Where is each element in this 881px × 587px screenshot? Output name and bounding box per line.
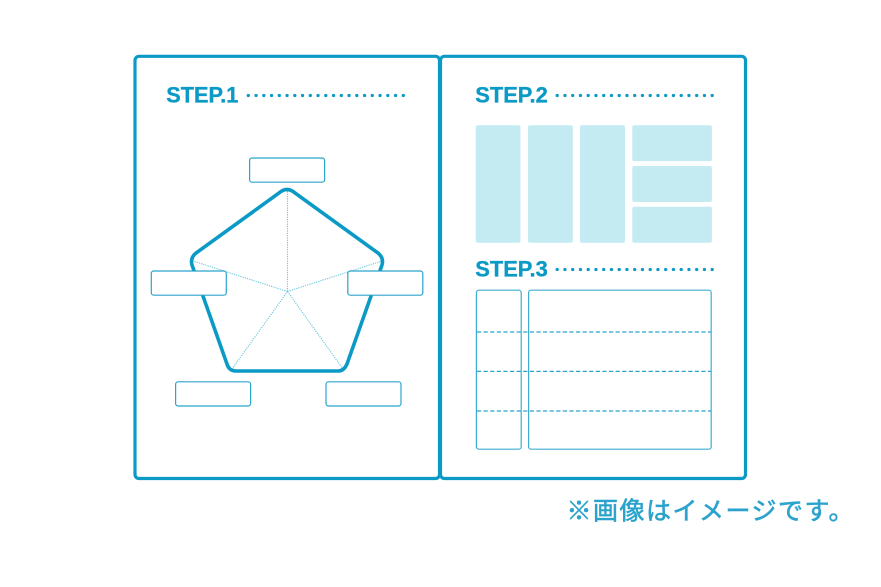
dotted rule: step 2	[557, 94, 712, 97]
row block 2	[632, 166, 712, 202]
table column: left	[476, 290, 521, 449]
row block 1	[632, 125, 712, 161]
dotted rule: step 1	[248, 94, 404, 97]
label box: bottom right	[326, 382, 401, 406]
block layout	[476, 125, 712, 243]
radar outline	[192, 190, 382, 371]
table row divider 1	[477, 331, 711, 333]
panel frame: step 1	[135, 56, 440, 479]
panel: step 1	[135, 56, 440, 479]
heading: step 2: STEP.2	[475, 83, 548, 108]
dotted rule: step 3	[557, 268, 712, 271]
table row divider 2	[477, 370, 711, 372]
panel: steps 2 and 3	[440, 56, 746, 479]
radar chart	[151, 158, 423, 406]
label box: left	[151, 271, 226, 295]
row block 3	[632, 207, 712, 243]
radar spokes	[193, 189, 382, 369]
footnote: ※画像はイメージです。	[566, 498, 855, 526]
table layout	[476, 290, 711, 449]
label box: right	[348, 271, 423, 295]
panel frame: steps 2 and 3	[440, 56, 746, 479]
label box: bottom left	[176, 382, 251, 406]
heading: step 1: STEP.1	[166, 83, 238, 108]
column block 3	[580, 125, 625, 243]
table row divider 3	[477, 410, 711, 412]
table column: right	[529, 290, 711, 449]
heading: step 3: STEP.3	[475, 257, 548, 282]
column block 1	[476, 125, 520, 243]
column block 2	[528, 125, 573, 243]
label box: top	[250, 158, 325, 182]
